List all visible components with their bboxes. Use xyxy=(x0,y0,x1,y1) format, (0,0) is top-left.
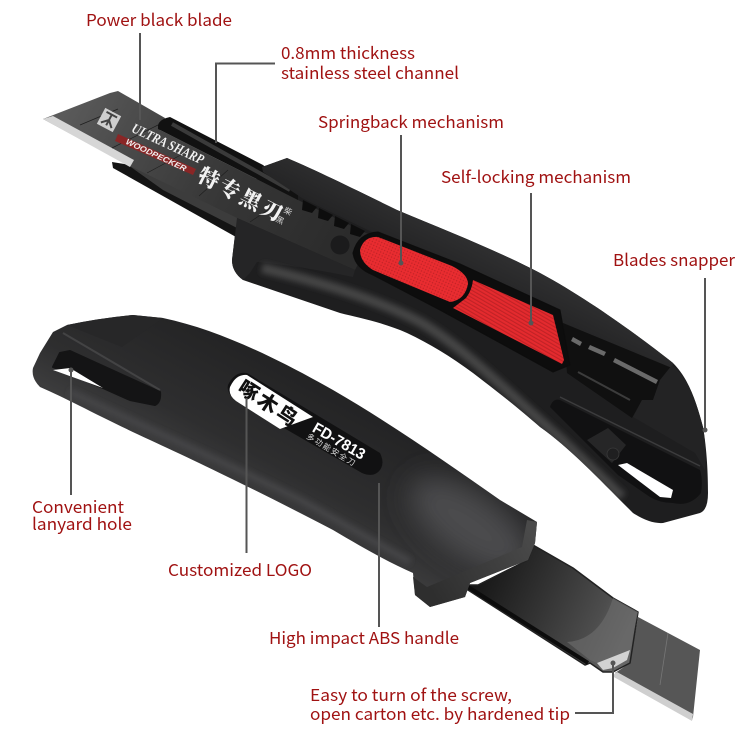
blade text: small Chinese mark: 柴 xyxy=(282,205,294,218)
holder curved shade xyxy=(567,598,638,663)
label: hardened tip: Easy to turn of the screw, xyxy=(310,682,512,706)
holder rod xyxy=(468,587,588,663)
blade text: small Chinese mark xyxy=(274,205,294,227)
lock pin xyxy=(330,236,350,254)
blade holder channel xyxy=(467,545,638,672)
nose cap xyxy=(633,365,706,470)
slot ridge xyxy=(560,397,700,466)
icon: blade brand mark xyxy=(97,108,121,132)
lower slot recess xyxy=(550,400,702,504)
grip lower highlight xyxy=(262,268,622,497)
slider surround xyxy=(353,232,570,372)
hardened tip xyxy=(597,650,630,670)
leader: blades snapper xyxy=(702,278,708,432)
label: blades snapper: Blades snapper xyxy=(613,247,736,271)
label: steel channel: stainless steel channel xyxy=(281,60,459,84)
leader: springback xyxy=(398,135,404,266)
label: ABS handle: High impact ABS handle xyxy=(269,625,459,649)
logo plate xyxy=(228,372,382,475)
logo text: brand name: 啄木鸟 xyxy=(233,372,304,432)
mechanism window xyxy=(563,323,672,418)
blade text: Chinese product name: 特专黑刃 xyxy=(193,160,288,228)
handle highlights xyxy=(72,392,526,574)
white hole xyxy=(618,463,673,498)
label: lanyard hole xyxy=(32,494,132,535)
blade red band: WOODPECKER: WOODPECKER xyxy=(124,137,188,173)
leader: power black blade xyxy=(139,33,141,120)
lanyard hole xyxy=(53,368,103,388)
front grip xyxy=(232,218,355,280)
front end facet xyxy=(413,520,537,607)
knife: lower view xyxy=(33,315,700,721)
blade and text panel xyxy=(43,91,372,270)
label: lanyard hole: lanyard hole xyxy=(32,511,132,535)
self-locking button xyxy=(453,280,564,364)
leader: customized logo xyxy=(246,398,248,553)
label: springback mechanism: Springback mechanism xyxy=(318,109,504,133)
label: self-locking mechanism: Self-locking mechanism xyxy=(441,164,631,188)
blade text: small Chinese mark: 黑 xyxy=(274,214,286,227)
label: hardened tip xyxy=(310,682,570,725)
leader: steel channel xyxy=(216,64,275,143)
label: hardened tip: open carton etc. by hardened tip xyxy=(310,701,570,725)
handle silhouette xyxy=(232,158,708,523)
leader: lanyard hole xyxy=(68,368,74,495)
label: steel channel xyxy=(281,40,459,84)
top shell xyxy=(262,158,673,370)
lanyard recess xyxy=(53,351,160,405)
knife: upper view xyxy=(43,91,708,523)
label: lanyard hole: Convenient xyxy=(32,494,124,518)
blade: lower view xyxy=(612,617,700,721)
lanyard ridge xyxy=(63,333,160,390)
blade text: ULTRA SHARP: ULTRA SHARP xyxy=(129,122,206,168)
label: steel channel: 0.8mm thickness xyxy=(281,40,415,64)
blade advance teeth xyxy=(302,200,365,237)
label: customized logo: Customized LOGO xyxy=(168,557,312,581)
blade red band: WOODPECKER xyxy=(115,134,196,175)
lower blade holder rail xyxy=(112,162,237,237)
logo text: model number: FD-7813 xyxy=(309,420,368,464)
leader: self-locking xyxy=(528,193,534,326)
stainless steel channel rail xyxy=(158,117,298,200)
logo text: product type: 多功能安全刀 xyxy=(304,431,357,469)
end cap facet xyxy=(67,315,163,347)
label: power black blade: Power black blade xyxy=(86,7,232,31)
leader: ABS handle xyxy=(378,483,380,627)
springback button xyxy=(360,237,468,302)
leader: hardened tip xyxy=(575,660,616,713)
handle body xyxy=(33,315,537,607)
